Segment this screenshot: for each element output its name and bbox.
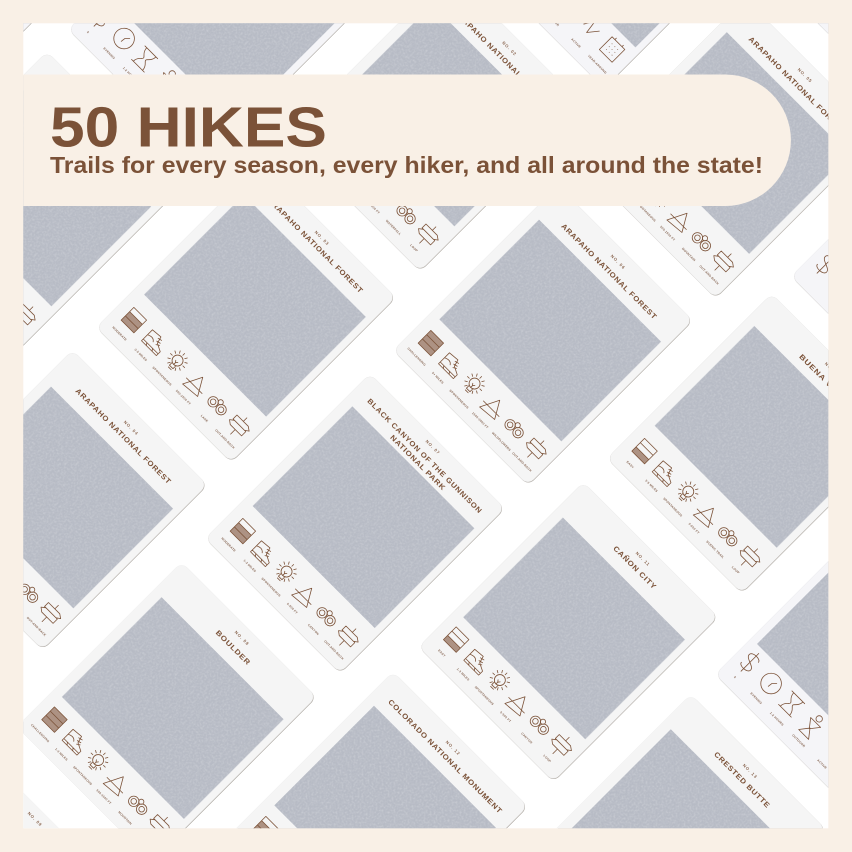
card number: NO. 09	[27, 811, 43, 828]
icon captions: 1500-3000 FT	[471, 411, 489, 429]
card: number 04	[23, 353, 204, 647]
icon captions	[220, 537, 345, 661]
icon captions: 3-5 MILES	[618, 184, 632, 198]
icon captions: 0-500 FT	[499, 710, 512, 723]
trail icons row	[583, 23, 626, 63]
icon captions: EASY	[437, 649, 447, 658]
difficulty icon	[632, 438, 657, 464]
icon captions: OUTDOOR	[791, 733, 807, 749]
icon captions: 3-5 MILES	[134, 348, 148, 362]
icon captions: OUT-AND-BACK	[26, 616, 48, 638]
banner	[23, 74, 791, 206]
icon captions	[111, 326, 236, 450]
icon captions: 5+ MILES	[431, 371, 445, 385]
card: number 10	[607, 294, 852, 594]
icon captions: WILDFLOWERS	[491, 431, 512, 452]
card title: CAÑON CITY	[611, 544, 659, 591]
card: number 08	[20, 565, 314, 850]
icon captions: SPONTANEOUS	[474, 685, 495, 706]
card title: CRESTED BUTTE	[712, 750, 772, 810]
card number: NO. 12	[445, 740, 461, 756]
icon captions: MODERATE	[596, 162, 612, 178]
card body	[235, 675, 525, 831]
card number: NO. 07	[425, 439, 441, 455]
icon captions: CANYON	[307, 623, 320, 637]
icon captions: YEAR-AROUND	[186, 130, 207, 151]
icon captions: 0-500 FT	[687, 522, 700, 535]
card body	[20, 565, 314, 831]
trail icons row	[655, 206, 734, 272]
icon captions: LOOP	[409, 243, 419, 253]
icon captions: 1-2 HOURS	[122, 66, 138, 82]
card photo	[274, 706, 496, 830]
card: number 03	[99, 206, 393, 460]
card title two lines: NATIONAL PARK	[388, 433, 448, 493]
trail icons row	[60, 725, 176, 841]
card number: NO. 10	[824, 361, 841, 378]
trail icons row	[736, 649, 852, 786]
icon captions: 3-5 MILES	[323, 157, 337, 171]
icon captions	[437, 649, 552, 763]
icon captions	[371, 206, 418, 252]
card title: ARAPAHO NATIONAL FOREST	[559, 222, 659, 321]
icon captions: 500-1500 FT	[659, 225, 676, 242]
trail icons row	[141, 329, 250, 436]
icon captions: CHALLENGING	[406, 346, 427, 367]
card title: BOULDER	[214, 628, 253, 667]
icon captions	[30, 723, 157, 850]
icon captions: OUT-AND-BACK	[214, 428, 236, 450]
card number: NO. 05	[797, 67, 813, 84]
card: blank corner top left	[23, 23, 32, 32]
card: number 05	[622, 23, 828, 296]
icon captions: OUT-AND-BACK	[0, 317, 22, 339]
icon captions: ACTIVE	[570, 37, 582, 49]
icon captions: $	[733, 675, 737, 679]
icon captions: SPONTANEOUS	[72, 765, 93, 786]
trail icons row	[23, 584, 61, 624]
difficulty icon	[443, 627, 469, 652]
icon captions: MODERATE	[300, 135, 317, 151]
difficulty icon	[605, 143, 631, 169]
card: number 06	[393, 186, 693, 486]
icon captions: ACTIVE	[816, 758, 828, 770]
icon captions: 500-1500 FT	[95, 788, 112, 805]
card title: ARAPAHO NATIONAL FOREST	[74, 386, 173, 486]
icon captions	[406, 346, 533, 473]
icon captions: SPONTANEOUS	[340, 175, 362, 196]
icon captions: MOUNTAIN	[117, 810, 133, 826]
icon captions	[555, 23, 606, 74]
card number: NO. 03	[314, 230, 330, 246]
card: number 02	[347, 23, 553, 268]
icon captions: YEAR-AROUND	[587, 54, 608, 75]
card: number 11	[418, 482, 719, 782]
icon captions: EASY	[626, 460, 635, 470]
card: number 12	[235, 675, 525, 842]
card: number 09	[0, 770, 60, 830]
card number: NO. 08	[234, 630, 250, 646]
title: 50 HIKES	[50, 96, 327, 160]
card number: NO. 04	[123, 419, 140, 436]
icon captions: OUTDOOR	[144, 88, 160, 104]
icon captions: SPONTANEOUS	[260, 577, 282, 598]
card title: ARAPAHO NATIONAL FOREST	[452, 7, 551, 107]
icon captions: MODERATE	[220, 537, 237, 553]
card title: ARAPAHO NATIONAL FOREST	[266, 195, 365, 295]
card number: NO. 13	[742, 763, 759, 780]
trail icons row	[650, 457, 766, 573]
trail icons row	[23, 304, 36, 326]
card title two lines: BLACK CANYON OF THE GUNNISON	[365, 397, 484, 515]
card title: COLORADO NATIONAL MONUMENT	[386, 697, 504, 815]
icon captions: EVENING	[102, 47, 116, 60]
trail icons row	[248, 537, 365, 653]
card: number 07	[205, 374, 505, 674]
icon captions: OUT-AND-BACK	[698, 264, 720, 286]
icon captions: 0-500 FT	[286, 602, 299, 615]
icon captions: $	[86, 30, 90, 34]
icon captions: OUT-AND-BACK	[323, 639, 345, 661]
icon captions: SPONTANEOUS	[636, 202, 657, 223]
icon captions: WATERFALL	[385, 219, 402, 236]
subtitle: Trails for every season, every hiker, and all around the state!	[50, 152, 763, 178]
card: right cost and time	[715, 510, 852, 810]
difficulty icon	[42, 707, 67, 732]
icon captions: EVENING	[749, 692, 763, 705]
icon captions: SPONTANEOUS	[448, 389, 470, 410]
trail icons row	[396, 206, 438, 246]
trail icons row	[462, 645, 578, 761]
icon captions	[733, 675, 852, 796]
icon captions: 1-3 MILES	[456, 667, 470, 682]
card photo	[571, 729, 777, 835]
card: top left cost and time	[71, 23, 345, 74]
icon captions: SPONTANEOUS	[662, 497, 683, 518]
icon captions: 1-3 MILES	[243, 559, 257, 573]
card: left under banner	[23, 54, 163, 346]
card title: ARAPAHO NATIONAL FOREST	[747, 35, 846, 134]
icon captions: LOOP	[731, 565, 740, 575]
icon captions: SPONTANEOUS	[151, 366, 173, 387]
card body	[0, 770, 60, 830]
icon captions: LAKE	[200, 414, 209, 423]
icon captions: 1-2 HOURS	[769, 711, 785, 727]
difficulty icon	[253, 816, 279, 842]
icon captions: 500-1500 FT	[175, 389, 192, 406]
trail icons row	[438, 352, 546, 460]
icon captions: CHALLENGING	[30, 723, 51, 744]
difficulty icon	[418, 330, 444, 356]
card: number 13	[550, 697, 823, 835]
difficulty icon	[121, 307, 147, 333]
card body	[550, 697, 823, 835]
card: top right corner	[818, 23, 828, 34]
icon captions	[626, 460, 740, 575]
icon captions: LOOP	[542, 754, 552, 763]
icon captions: CANYON	[520, 731, 534, 745]
icon captions	[86, 31, 132, 74]
icon captions: 1-3 MILES	[54, 747, 69, 762]
icon captions: OUTDOOR	[545, 12, 561, 28]
icon captions: MODERATE	[111, 326, 128, 342]
card photo	[62, 597, 284, 819]
trail icons row	[94, 23, 176, 74]
icon captions: SCENIC TRAIL	[705, 540, 725, 559]
icon captions: MOUNTAIN	[681, 247, 697, 263]
card: right edge peek	[791, 112, 852, 412]
card number: NO. 11	[635, 551, 651, 567]
icon captions: LAKE	[11, 601, 21, 611]
difficulty icon	[310, 116, 336, 142]
icon captions: OUT-AND-BACK	[135, 828, 157, 850]
difficulty icon	[230, 518, 256, 544]
trail icons row	[812, 251, 852, 388]
banner pill shape	[23, 74, 791, 206]
card number: NO. 06	[610, 254, 626, 270]
card title: BUENA VISTA	[797, 352, 850, 405]
card: top centre icons	[538, 23, 670, 74]
icon captions: OUT-AND-BACK	[511, 451, 533, 473]
icon captions: 3-5 MILES	[644, 479, 659, 493]
icon captions: 500-1500 FT	[364, 198, 381, 215]
icon captions: ACTIVE	[169, 113, 181, 125]
card number: NO. 02	[501, 40, 518, 57]
icon captions	[640, 206, 719, 285]
